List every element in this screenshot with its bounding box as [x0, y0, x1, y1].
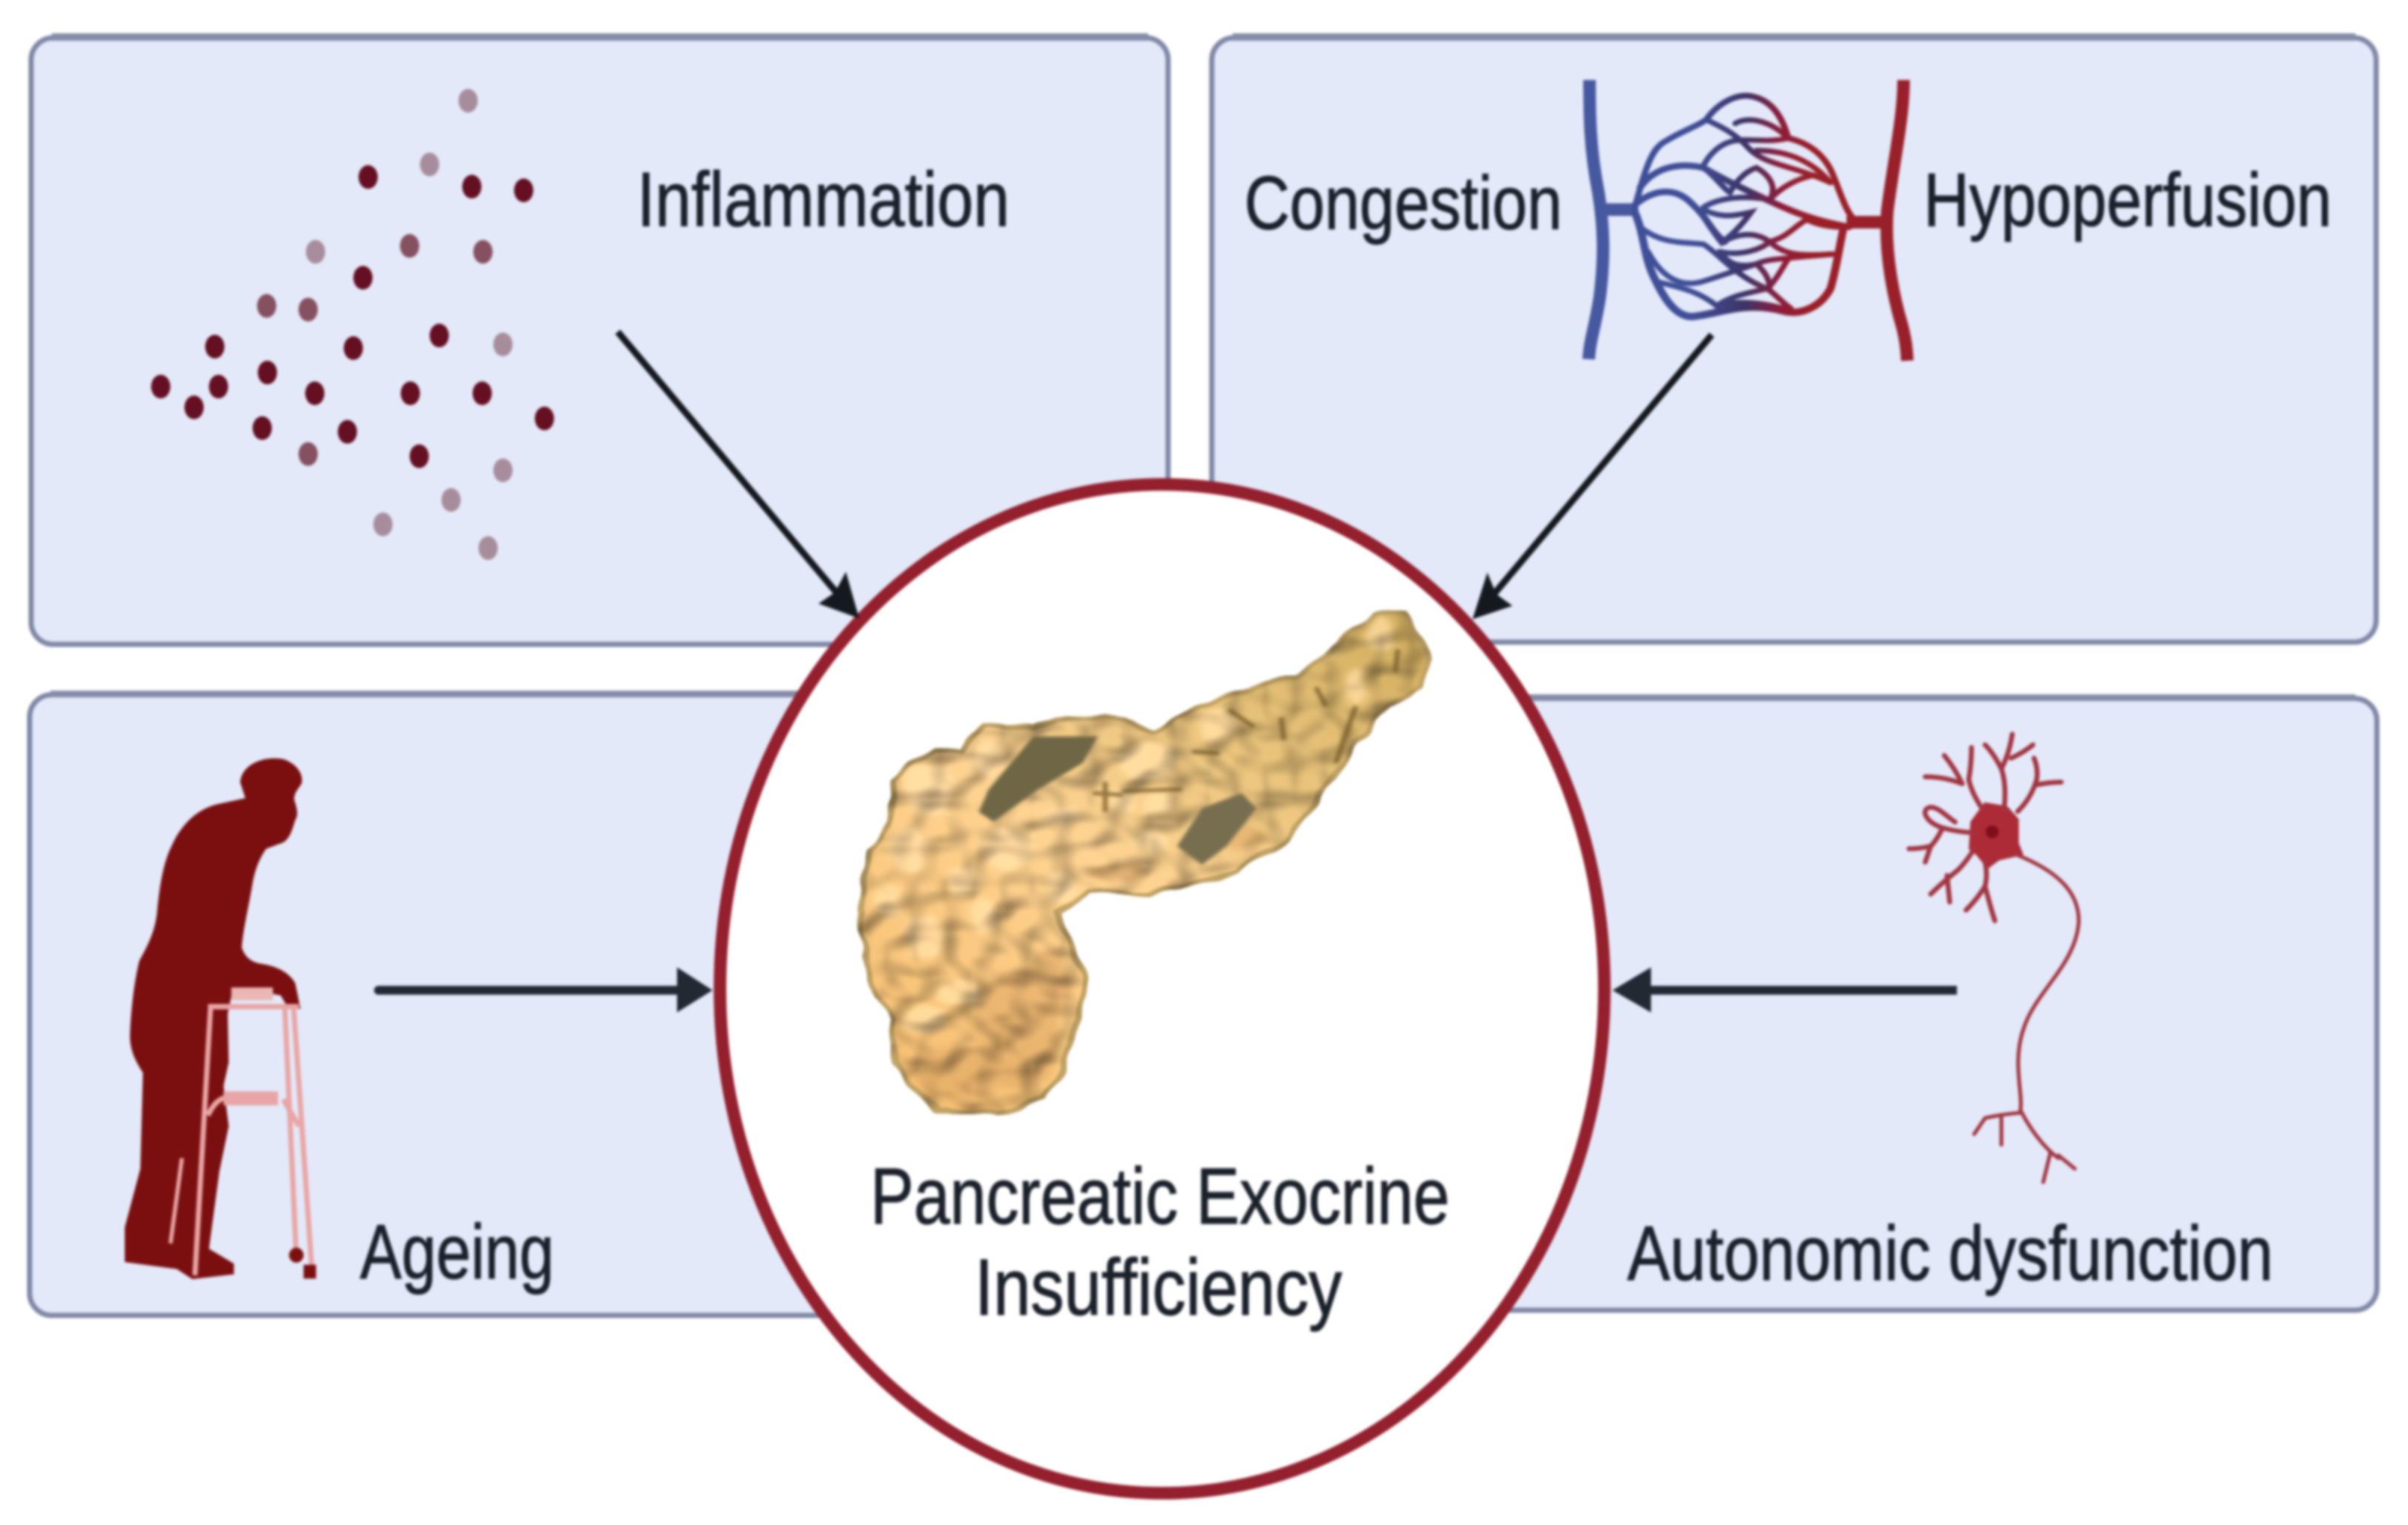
lesion — [1177, 793, 1256, 865]
pancreas shading — [914, 827, 1267, 1099]
title line 2: Insufficiency — [975, 1242, 1342, 1332]
pancreas tissue — [860, 612, 1425, 1114]
central ellipse — [720, 484, 1604, 1493]
nucleus — [1986, 825, 1998, 838]
axon — [1974, 854, 2078, 1182]
vein — [1589, 80, 1638, 359]
pancreas body — [860, 612, 1425, 1114]
panel: congestion and hypoperfusion — [1212, 38, 2376, 642]
icon: capillary bed between vein and artery — [1589, 80, 1907, 361]
label: Autonomic dysfunction: Autonomic dysfunction — [1627, 1211, 2273, 1297]
label: Ageing: Ageing — [360, 1209, 554, 1295]
label: Inflammation: Inflammation — [637, 157, 1010, 243]
capillary network — [1635, 96, 1854, 316]
illustration: pancreas — [860, 612, 1425, 1114]
artery — [1847, 80, 1907, 361]
arrow: ageing to centre — [378, 967, 713, 1012]
arrow: inflammation to centre — [618, 332, 859, 618]
panel: ageing — [30, 695, 918, 1315]
icon: elderly person with walker — [124, 758, 316, 1279]
lesion — [978, 736, 1098, 821]
panel: inflammation — [31, 38, 1168, 644]
title line 1: Pancreatic Exocrine — [870, 1151, 1450, 1241]
panel: autonomic dysfunction — [1407, 698, 2377, 1310]
icon: inflammation particles — [151, 89, 554, 560]
walker feet — [289, 1248, 304, 1263]
arrow: autonomic dysfunction to centre — [1612, 967, 1957, 1012]
walker frame — [170, 994, 312, 1275]
silhouette — [124, 758, 302, 1279]
label: Hypoperfusion: Hypoperfusion — [1924, 158, 2332, 242]
arrow: vascular to centre — [1473, 335, 1712, 619]
icon: neuron — [1909, 734, 2078, 1182]
pancreas fissures — [1093, 650, 1398, 812]
pancreas highlights — [875, 615, 1393, 1035]
label: Congestion: Congestion — [1244, 161, 1562, 245]
dendrites — [1909, 734, 2061, 921]
soma — [1970, 804, 2022, 867]
